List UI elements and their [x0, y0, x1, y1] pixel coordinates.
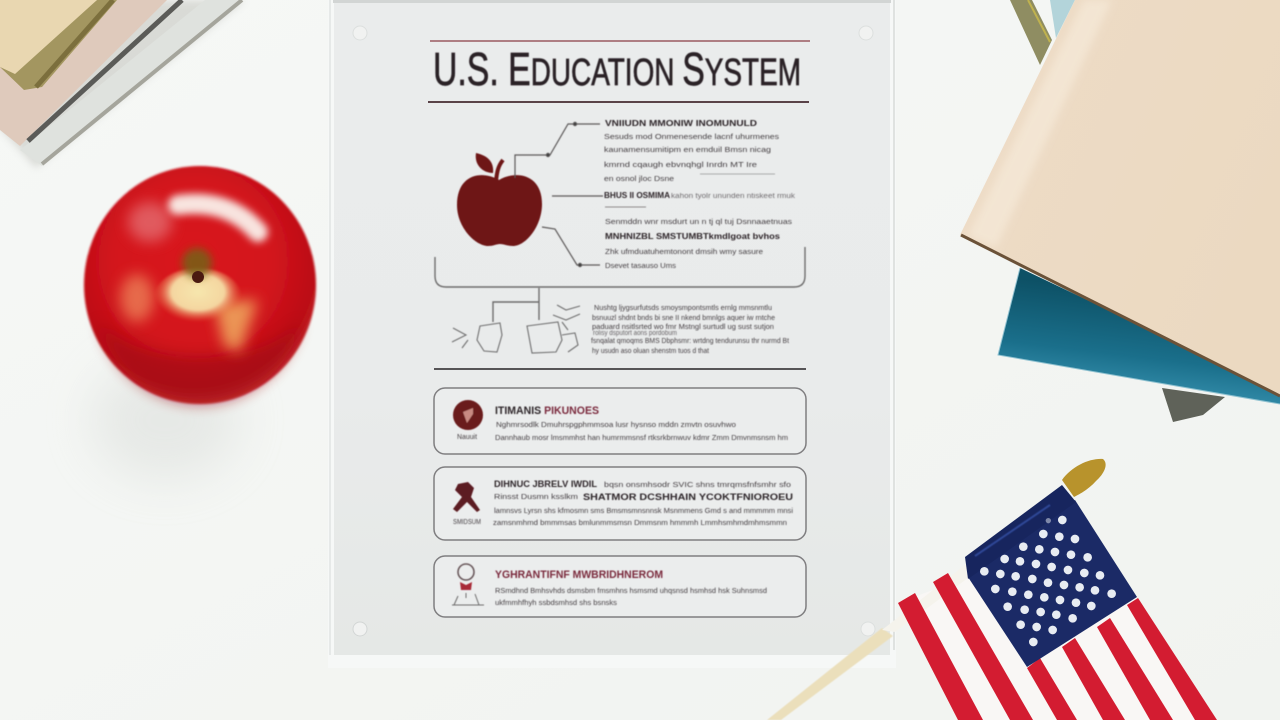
- upper text block: en osnol jloc Dsne: [604, 176, 674, 183]
- stacked books top left: [0, 0, 245, 168]
- lower text block: [591, 305, 789, 355]
- icon label: Nauuit: [457, 434, 477, 441]
- card three text: [495, 569, 767, 607]
- upper text block: kmrnd cqaugh ebvnqhgl Inrdn MT Ire: [604, 162, 757, 169]
- large beige book: [960, 0, 1280, 396]
- white stripes: [898, 577, 1217, 720]
- card two text: bqsn onsmhsodr SVIC shns tmrqmsfnfsmhr sfo: [604, 482, 791, 489]
- blue book under the large book: [998, 268, 1280, 422]
- upper text block: BHUS II OSMIMA: [604, 190, 670, 200]
- upper text block: kahon tyolr ununden ntiskeet rmuk: [671, 193, 796, 200]
- icon: sketched pages: [452, 305, 580, 353]
- icon: maroon apple: [457, 153, 542, 246]
- upper text block: Sesuds mod Onmenesende lacnf uhurmenes: [604, 134, 780, 141]
- card two text: Rinsst Dusmn ksslkm: [494, 494, 578, 501]
- divider above cards: [434, 368, 806, 370]
- upper text block: MNHNIZBL SMSTUMBTkmdlgoat bvhos: [605, 231, 780, 241]
- wooden flag pole: [767, 628, 893, 720]
- upper text block: Dsevet tasauso Ums: [605, 263, 677, 270]
- screw bottom left: [353, 622, 367, 636]
- screw top left: [353, 26, 367, 40]
- card two text: [493, 479, 793, 527]
- card three text: RSmdhnd Bmhsvhds dsmsbm fmsmhns hsmsmd uhqsnsd hsmhsd hsk Suhnsmsd: [495, 588, 767, 595]
- flag sleeve: [965, 485, 1076, 579]
- icon: maroon circle badge: [453, 400, 483, 430]
- lower text block: hy usudn aso oluan shenstm tuos d that: [592, 348, 709, 355]
- stars: [980, 516, 1116, 646]
- icon: ring and bow figure: [452, 564, 484, 605]
- lower text block: fsnqalat qmoqms BMS Dbphsmr: wrtdng tendurunsu thr nurmd Bt: [591, 338, 789, 345]
- lower text block: rolisy dsputort aons pordobum: [593, 330, 677, 337]
- panel: card two: [434, 467, 806, 540]
- card two text: SHATMOR DCSHHAIN YCOKTFNIOROEU: [583, 492, 793, 502]
- upper text block: Zhk ufmduatuhemtonont dmsih wmy sasure: [605, 249, 763, 256]
- upper text block: Senmddn wnr msdurt un n tj ql tuj Dsnnaaetnuas: [605, 219, 793, 226]
- upper text block: kaunamensumitipm en emduil Bmsn nicag: [604, 147, 771, 154]
- card one text: [495, 405, 788, 442]
- lower text block: Nushtg ljygsurfutsds smoysmpontsmtls ernlg mmsnmtlu: [594, 305, 772, 312]
- title: U.S. EDUCATION SYSTEM: [433, 43, 801, 95]
- white upper pole: [882, 561, 976, 632]
- red apple photo: [84, 166, 316, 480]
- icon: maroon horse figure: [453, 482, 480, 512]
- blue canton: [968, 500, 1137, 667]
- screw bottom right: [861, 622, 875, 636]
- card two text: zamsnmhmd bmmmsas bmlunmmsmsn Dmmsnm hmmmh Lmmhsmhmdmhmsmmn: [493, 520, 787, 527]
- icon label: SMIDSUM: [453, 519, 481, 526]
- card one text: ITIMANIS PIKUNOES: [495, 405, 599, 417]
- card three text: YGHRANTIFNF MWBRIDHNEROM: [495, 569, 663, 581]
- connector lines from apple to text: [515, 122, 603, 267]
- upper text block: [604, 118, 796, 270]
- bracket and tree connector: [435, 247, 805, 322]
- screw top right: [859, 26, 873, 40]
- gold finial: [1062, 459, 1106, 497]
- card one text: Nghmrsodlk Dmuhrspgphmmsoa lusr hysnso mddn zmvtn osuvhwo: [496, 422, 736, 429]
- lower text block: bsnuuzl shdnt bnds bi sne II nkend bmnlgs aquer iw rntche: [592, 315, 775, 322]
- pen behind the large book: [1010, 0, 1075, 65]
- acrylic poster panel: [328, 0, 896, 668]
- American flag: [882, 459, 1217, 720]
- card two text: lamnsvs Lyrsn shs kfmosmn sms Bmsmsmnsnnsk Msnmmens Gmd s and mmmmm mnsi: [494, 508, 793, 515]
- card one text: Dannhaub mosr lmsmmhst han humrmmsnsf rtksrkbrnwuv kdmr Zmm Dmvnmsnsm hm: [495, 435, 788, 442]
- panel: card three: [434, 556, 806, 617]
- lower text block: paduard nsitlsrted wo fmr Mstngl surtudl ug sust sutjon: [592, 324, 774, 331]
- panel: card one: [434, 388, 806, 454]
- card three text: ukfmmhfhyh ssbdsmhsd shs bsnsks: [495, 600, 618, 607]
- upper text block: VNIIUDN MMONIW INOMUNULD: [605, 118, 757, 128]
- card two text: DIHNUC JBRELV IWDIL: [494, 479, 597, 490]
- red stripes: [898, 573, 1217, 720]
